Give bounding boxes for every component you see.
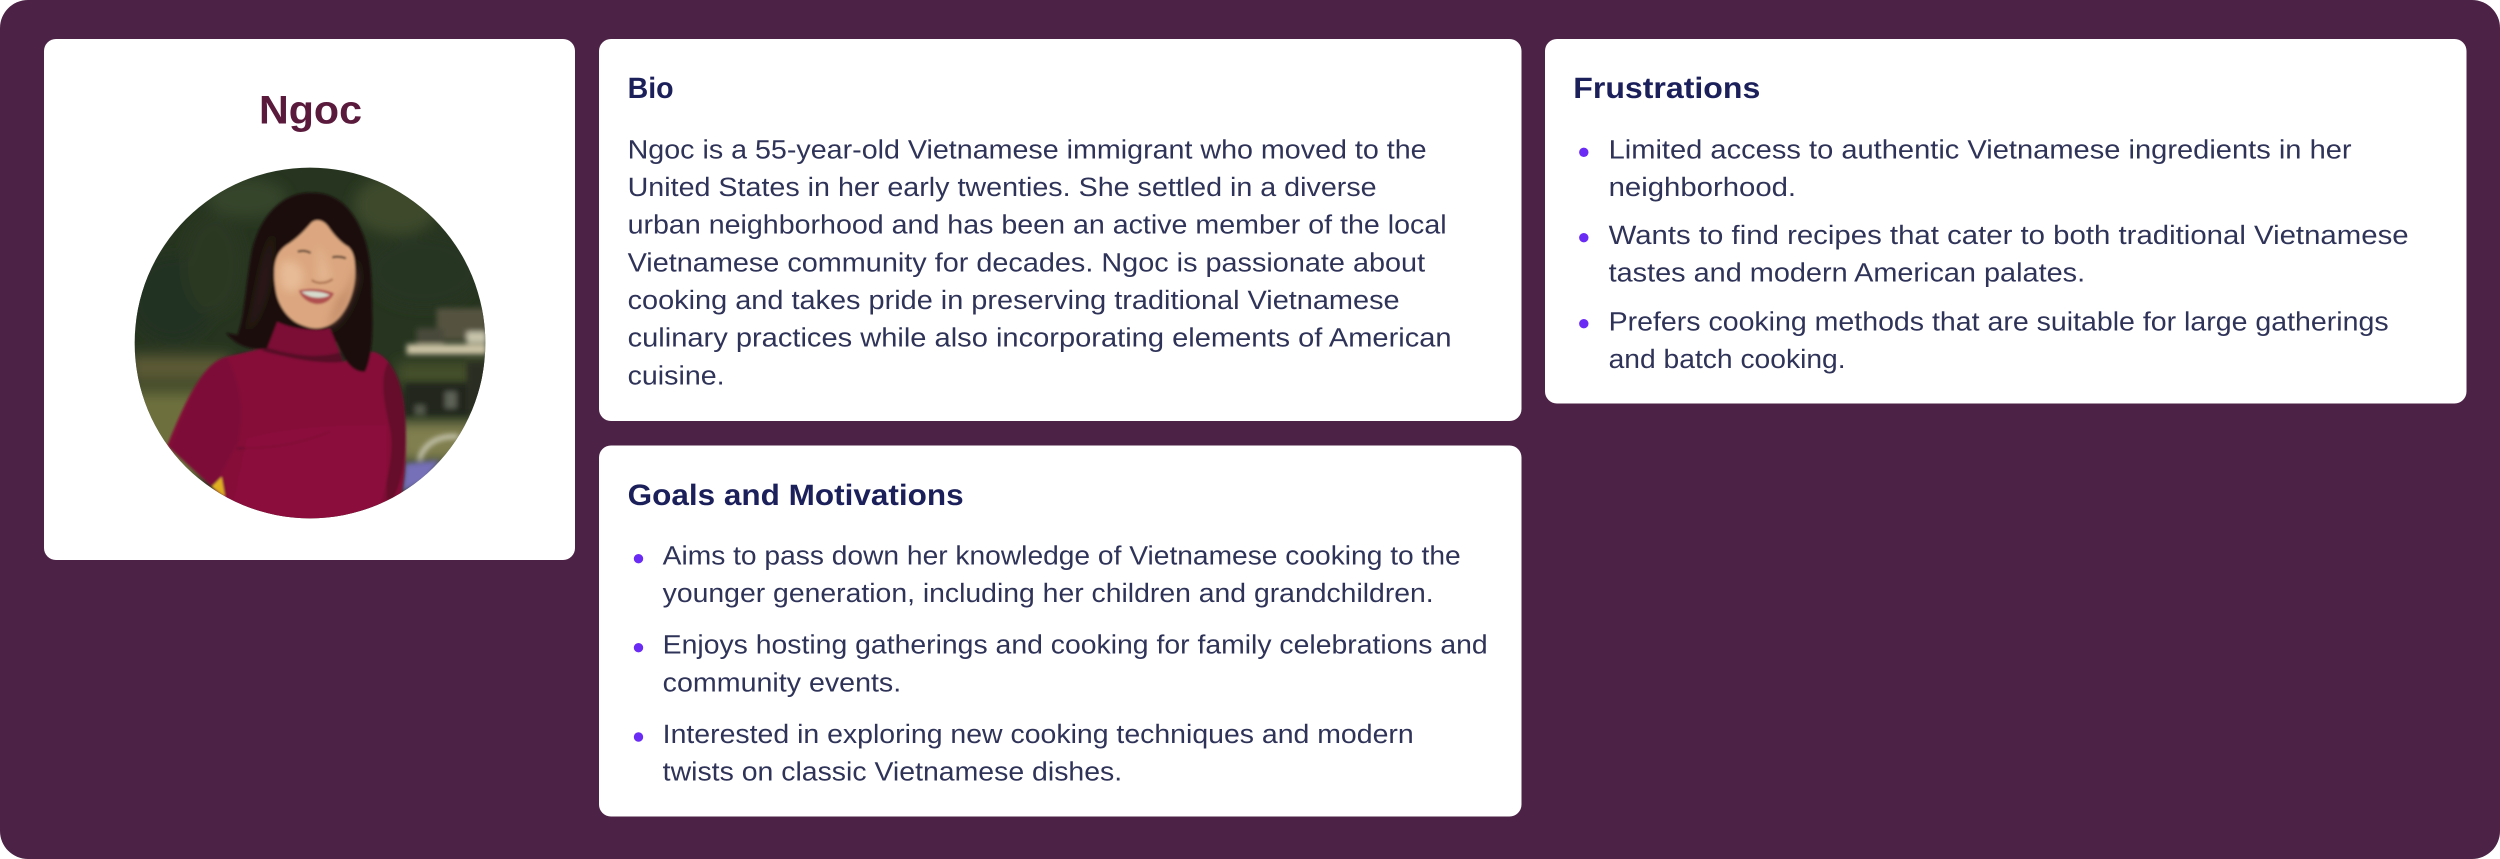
frustration item 1 xyxy=(1579,134,2352,202)
bio text: culinary practices while also incorporating elements of American xyxy=(628,323,1452,353)
frustration item 2: tastes and modern American palates. xyxy=(1609,258,2085,288)
portrait photo xyxy=(130,165,490,525)
frustration item 2 xyxy=(1579,220,2409,288)
eyes xyxy=(298,251,311,253)
goal item 1: younger generation, including her children and grandchildren. xyxy=(663,578,1434,608)
sweater xyxy=(167,347,406,523)
frustration item 3: and batch cooking. xyxy=(1609,344,1846,374)
frustration item 3: Prefers cooking methods that are suitable for large gatherings xyxy=(1609,306,2389,336)
bio text: Vietnamese community for decades. Ngoc is passionate about xyxy=(628,247,1426,277)
bio text: Ngoc is a 55-year-old Vietnamese immigrant who moved to the xyxy=(628,134,1427,164)
heading: frustrations: Frustrations xyxy=(1573,72,1760,105)
frustration item 1: neighborhood. xyxy=(1609,172,1796,202)
goal item 3: Interested in exploring new cooking techniques and modern xyxy=(663,719,1414,749)
goal item 1 xyxy=(634,540,1461,608)
bio text: cooking and takes pride in preserving traditional Vietnamese xyxy=(628,285,1400,315)
mouth xyxy=(299,289,334,304)
heading: bio: Bio xyxy=(628,72,674,105)
frustration item 1: Limited access to authentic Vietnamese ingredients in her xyxy=(1609,134,2352,164)
bio text: urban neighborhood and has been an active member of the local xyxy=(628,210,1447,240)
bio text: United States in her early twenties. She settled in a diverse xyxy=(628,172,1377,202)
panel: bio xyxy=(599,39,1522,421)
goal item 3: twists on classic Vietnamese dishes. xyxy=(663,757,1122,787)
hair xyxy=(226,193,373,372)
panel: frustrations xyxy=(1545,39,2466,404)
nose xyxy=(312,279,333,283)
turtleneck xyxy=(267,322,340,356)
panel: profile xyxy=(44,39,575,560)
bio text xyxy=(628,134,1452,390)
heading: name: Ngoc xyxy=(259,88,362,132)
heading: goals and motivations: Goals and Motivations xyxy=(628,479,964,512)
goal item 3 xyxy=(634,719,1414,787)
panel: goals and motivations xyxy=(599,446,1522,816)
goal item 2: community events. xyxy=(663,667,901,697)
bio text: cuisine. xyxy=(628,360,725,390)
goal item 2: Enjoys hosting gatherings and cooking for family celebrations and xyxy=(663,630,1488,660)
goal item 2 xyxy=(634,630,1488,697)
frustration item 2: Wants to find recipes that cater to both traditional Vietnamese xyxy=(1609,220,2409,250)
frustration item 3 xyxy=(1579,306,2389,374)
goal item 1: Aims to pass down her knowledge of Vietnamese cooking to the xyxy=(663,540,1461,570)
face xyxy=(274,220,355,328)
